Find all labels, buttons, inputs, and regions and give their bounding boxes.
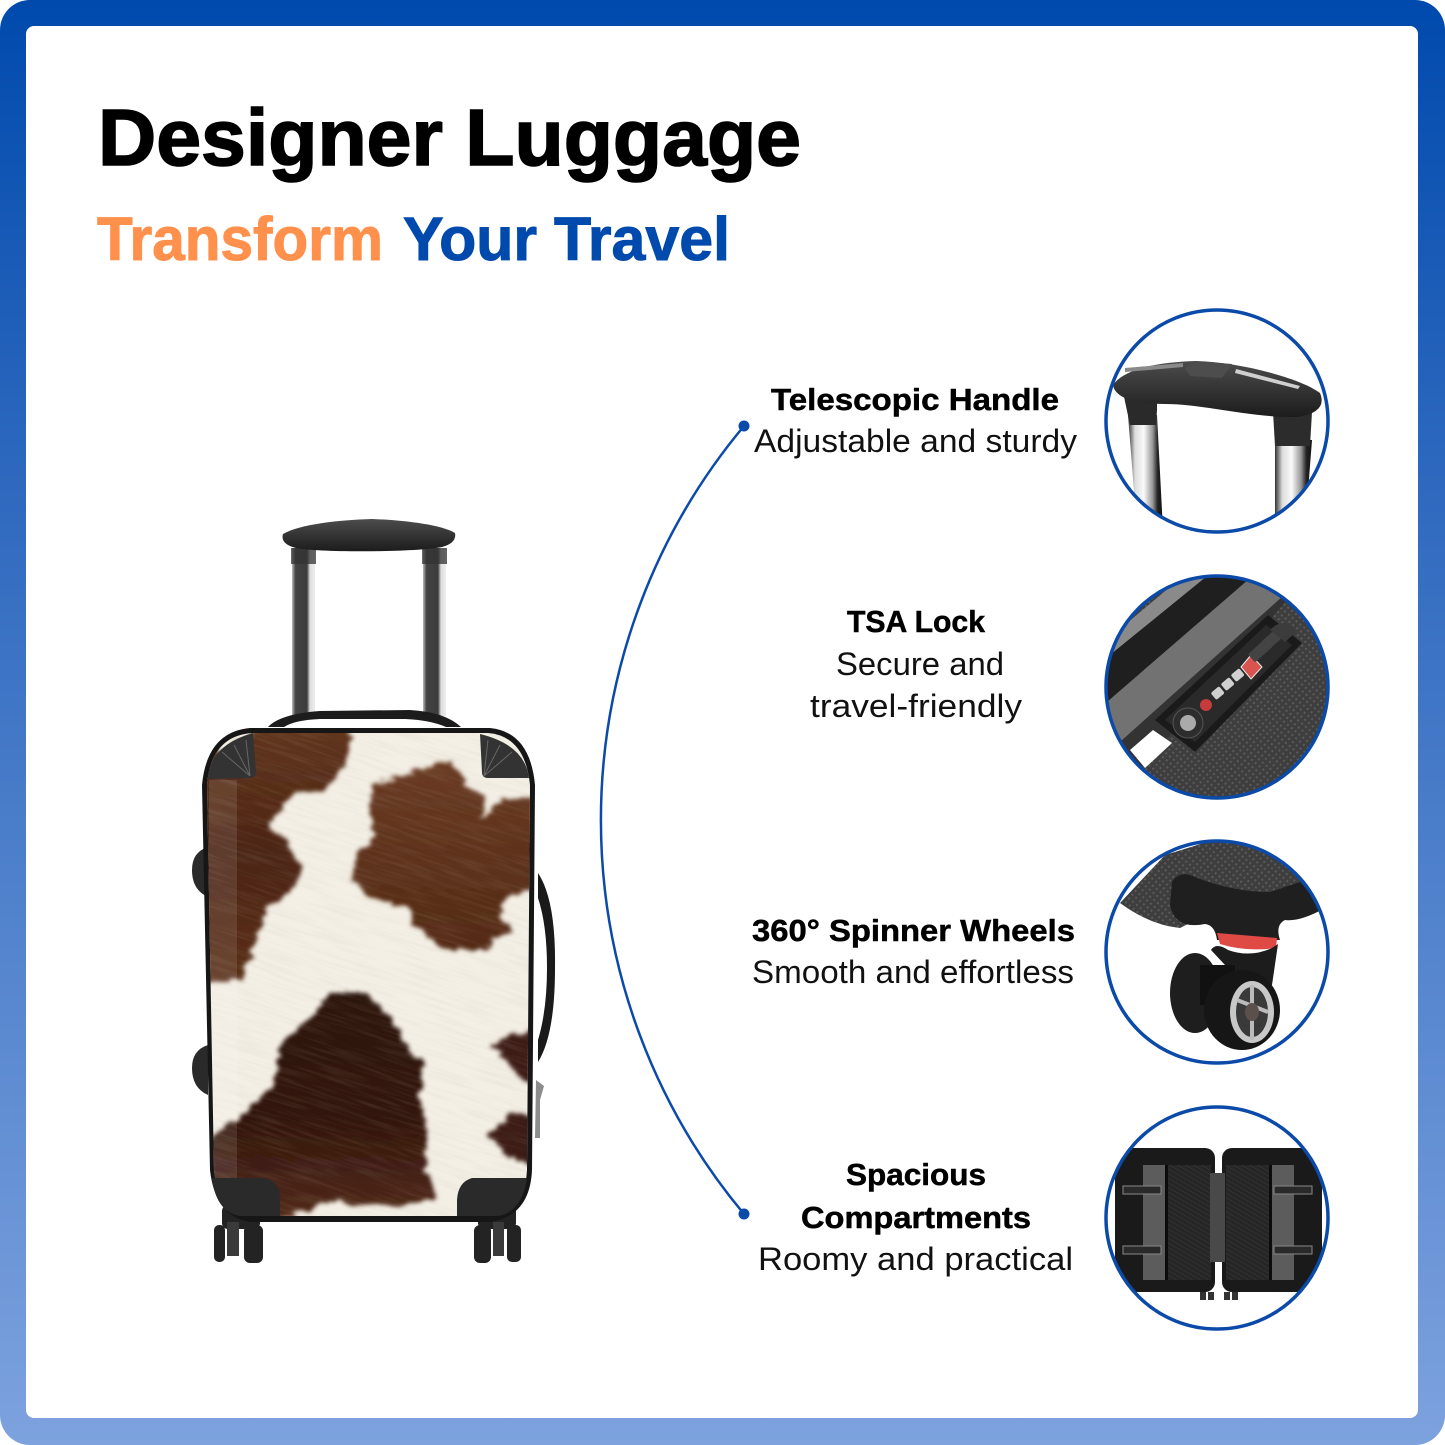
feature: TSA lock: travel-friendly — [810, 688, 1022, 724]
zipper pull — [535, 1080, 544, 1138]
cowhide fabric panel — [207, 733, 530, 1216]
photo circle: open compartments — [1100, 1100, 1335, 1335]
photo circle: handle — [1100, 305, 1335, 540]
title: Designer Luggage — [98, 93, 801, 182]
feature: TSA lock — [810, 604, 1022, 724]
subtitle: Transform — [97, 205, 383, 273]
subtitle — [97, 205, 730, 273]
shell — [202, 728, 535, 1222]
side handle — [538, 873, 555, 1062]
feature: spacious compartments: Compartments — [801, 1200, 1031, 1235]
gloss stripe — [209, 780, 237, 1216]
carry handle — [268, 710, 461, 727]
handle grip — [283, 519, 455, 551]
connector dots — [738, 420, 750, 1220]
wheels — [214, 1205, 521, 1263]
bottom corner guards — [212, 1178, 527, 1216]
subtitle: Your Travel — [403, 205, 730, 273]
connector arc — [601, 420, 750, 1220]
photo circle: TSA lock — [1095, 570, 1335, 805]
suitcase illustration — [192, 519, 556, 1263]
feature: telescopic handle: Telescopic Handle — [771, 382, 1059, 417]
feature: spacious compartments — [758, 1157, 1073, 1277]
top corner guards — [208, 733, 529, 779]
feature: spinner wheels: Smooth and effortless — [752, 954, 1074, 990]
feature: spacious compartments: Roomy and practical — [758, 1241, 1073, 1277]
feature: TSA lock: Secure and — [836, 646, 1004, 682]
feature: spinner wheels: 360° Spinner Wheels — [752, 913, 1075, 948]
photo circle: spinner wheel — [1100, 835, 1335, 1070]
feature: spacious compartments: Spacious — [846, 1157, 986, 1192]
feature: spinner wheels — [752, 913, 1075, 990]
feature: telescopic handle: Adjustable and sturdy — [754, 423, 1077, 459]
telescopic handle tubes — [291, 548, 447, 716]
feature: TSA lock: TSA Lock — [847, 604, 986, 639]
side knobs — [192, 847, 208, 1095]
feature: telescopic handle — [754, 382, 1077, 459]
